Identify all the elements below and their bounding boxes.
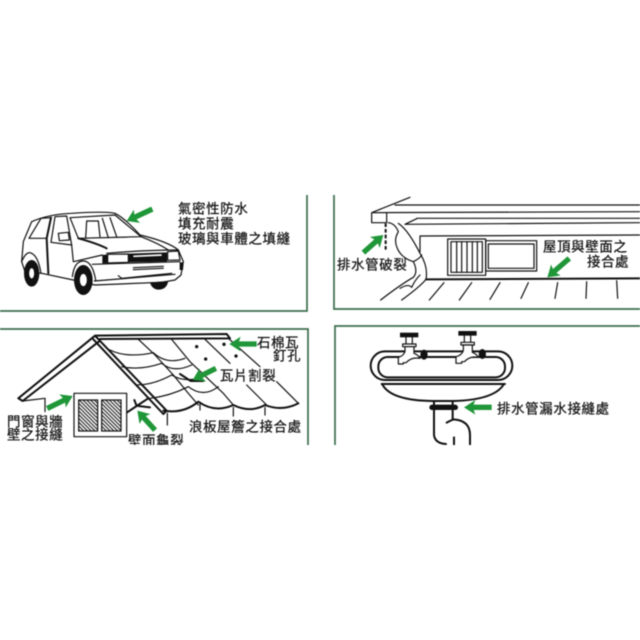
text: roof wall joint: 接合處 — [587, 254, 629, 270]
arrow: roof wall joint — [543, 253, 574, 283]
window — [486, 241, 537, 271]
text: car windshield seam: 玻璃與車體之填縫 — [178, 230, 291, 246]
text: roof wall joint: 屋頂與壁面之 — [543, 240, 628, 254]
roof and wall illustration — [359, 197, 640, 300]
tile crack — [180, 374, 203, 381]
text: wall crack: 壁面龜裂 — [128, 434, 184, 448]
text: asbestos tile nail holes: 石棉瓦 — [257, 336, 299, 350]
faucet left — [398, 333, 428, 364]
text: drain joint leak: 排水管漏水接縫處 — [497, 400, 610, 416]
panel: car — [0, 195, 307, 311]
arrow: nail holes — [229, 337, 257, 351]
text: tile crack: 瓦片割裂 — [220, 368, 276, 384]
text: car windshield seam: 填充耐震 — [178, 216, 234, 232]
arrow: wall crack — [136, 410, 158, 432]
text: window and wall seam: 門窗與牆 — [7, 414, 63, 430]
text: asbestos tile nail holes: 釘孔 — [273, 348, 301, 364]
arrow: drain joint — [464, 400, 492, 415]
text: car windshield seam — [178, 200, 291, 246]
arrow: tile crack — [192, 366, 218, 382]
text: window and wall seam: 壁之接縫 — [7, 426, 63, 442]
panel: tiled roof — [0, 329, 308, 448]
wall crack — [127, 398, 150, 413]
sink illustration — [371, 331, 512, 446]
car illustration — [22, 202, 184, 295]
window with hatched panes — [74, 393, 127, 437]
text: car windshield seam: 氣密性防水 — [178, 200, 248, 216]
text: corrugated eave joint: 浪板屋簷之接合處 — [189, 418, 302, 434]
arrow: drain pipe crack — [359, 230, 388, 258]
drain pipe — [432, 401, 470, 446]
panel: roof and drain pipe — [334, 195, 640, 309]
text: roof wall joint — [543, 240, 629, 270]
panel: sink — [335, 326, 640, 446]
text: window and wall seam — [7, 414, 63, 442]
tile rows — [110, 338, 298, 425]
text: asbestos tile nail holes — [257, 336, 301, 364]
icon: dripping water — [383, 223, 389, 251]
arrow: windshield seam — [124, 202, 155, 228]
faucet right — [456, 331, 486, 363]
text: drain pipe crack: 排水管破裂 — [337, 258, 407, 272]
roof illustration — [18, 334, 298, 437]
arrow: window seam — [46, 394, 74, 412]
vent — [448, 239, 486, 275]
